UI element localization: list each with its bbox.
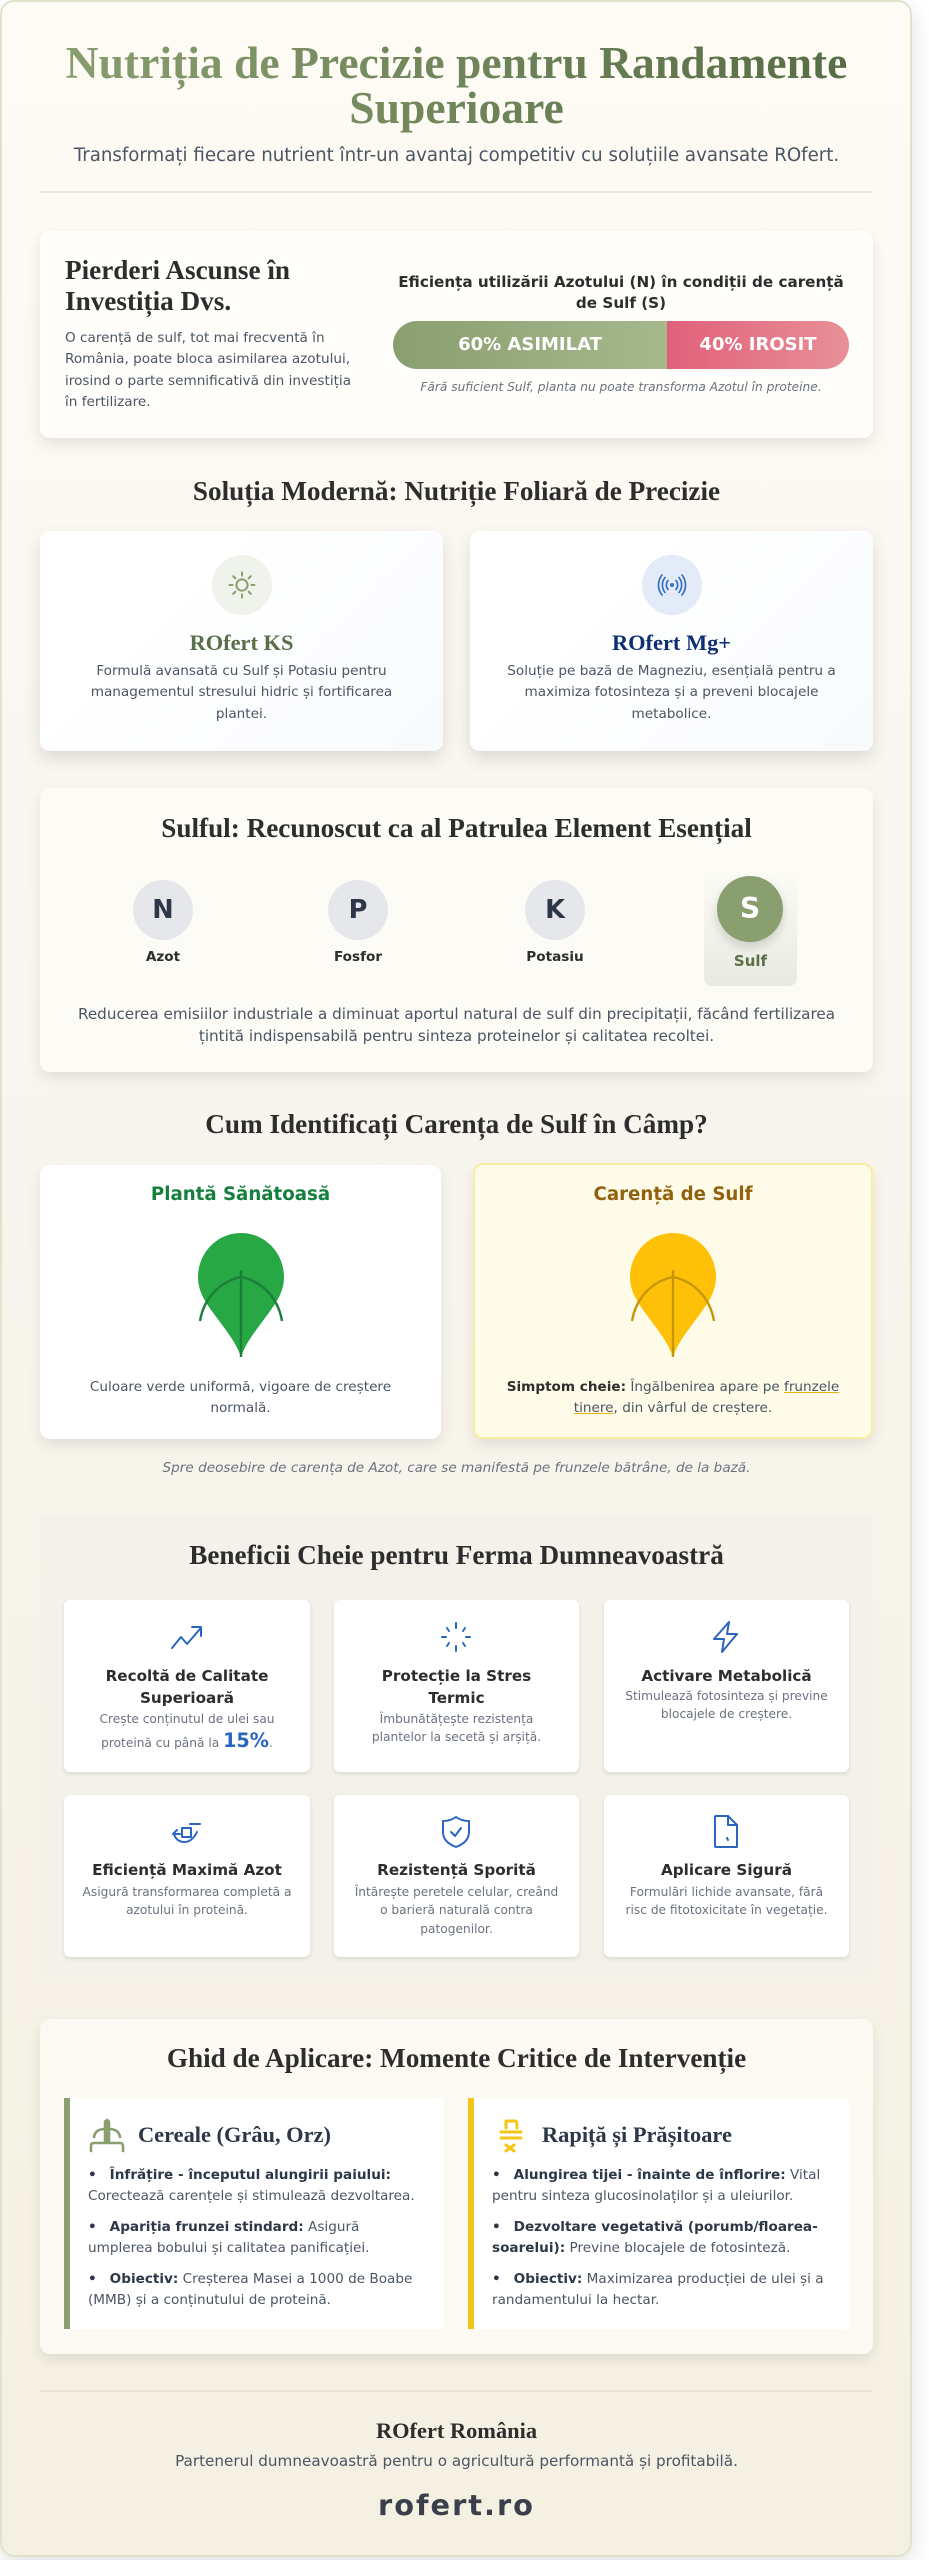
footer text: Partenerul dumneavoastră pentru o agricultură performantă și profitabilă. <box>175 2452 738 2470</box>
text: deficiency <box>507 1378 840 1416</box>
benefit: nitrogen efficiency: Eficiență Maximă Azot <box>92 1861 282 1879</box>
bar chart: nitrogen use <box>393 321 849 369</box>
benefit: safe application <box>604 1795 849 1957</box>
text: deficiency: tinere, din vârful de creștere. <box>574 1400 772 1416</box>
benefit: quality: Superioară <box>140 1689 234 1707</box>
heading: guide: Ghid de Aplicare: Momente Critice de Intervenție <box>167 2043 746 2073</box>
benefit: nitrogen efficiency <box>64 1795 310 1957</box>
benefit: heat stress: plantelor la secetă și arșiță. <box>372 1730 541 1744</box>
benefit: safe application: risc de fitotoxicitate în vegetație. <box>626 1903 828 1917</box>
element: N <box>133 880 193 965</box>
product text: managementul stresului hidric și fortificarea <box>91 684 392 700</box>
text: sulfur: Reducerea emisiilor industriale a diminuat aportul natural de sulf din precipitații, făcând fertilizarea <box>78 1005 835 1023</box>
heading: hidden losses: Investiția Dvs. <box>65 286 231 316</box>
chart heading <box>398 273 844 312</box>
benefit: nitrogen efficiency: azotului în proteină. <box>126 1903 248 1917</box>
icon: cereal plant <box>90 2118 124 2152</box>
title: Nutriția de Precizie pentru Randamente <box>66 37 847 88</box>
benefit: quality: proteină cu până la 15%. <box>101 1729 273 1752</box>
panel: cereals: • Apariția frunzei stindard: Asigură <box>88 2219 359 2235</box>
subtitle: Transformați fiecare nutrient într-un avantaj competitiv cu soluțiile avansate ROfert. <box>74 145 839 166</box>
text: deficiency: Simptom cheie: Îngălbenirea apare pe frunzele <box>507 1379 839 1395</box>
heading: hidden losses <box>65 255 290 318</box>
crop list: pentru sinteza glucosinolaților și a uleiurilor. <box>492 2188 793 2204</box>
benefit: resistance: Rezistență Sporită <box>377 1861 536 1879</box>
benefit: nitrogen efficiency: Asigură transformarea completă a <box>83 1885 291 1899</box>
benefit: safe application: Formulări lichide avansate, fără <box>630 1885 823 1899</box>
icon: sun <box>212 555 272 615</box>
benefit: metabolic: blocajele de creștere. <box>661 1707 792 1721</box>
chart heading: Eficiența utilizării Azotului (N) în condiții de carență <box>398 273 844 291</box>
benefit: heat stress: Termic <box>428 1689 485 1707</box>
bar segment: wasted <box>667 321 849 369</box>
product text: Formulă avansată cu Sulf și Potasiu pentru <box>96 663 387 679</box>
crop list: Corectează carențele și stimulează dezvoltarea. <box>88 2188 415 2204</box>
text: hidden losses <box>64 330 351 410</box>
benefit: metabolic: Stimulează fotosinteza și previne <box>625 1689 828 1703</box>
crop title: Rapiță și Prășitoare <box>542 2122 732 2147</box>
panel: cereals <box>64 2098 444 2329</box>
icon: rapeseed <box>500 2120 522 2153</box>
benefit: quality: Recoltă de Calitate <box>106 1667 268 1685</box>
product text: maximiza fotosinteza și a preveni blocajele <box>525 684 818 700</box>
panel: rapeseed: • Dezvoltare vegetativă (porumb/floarea- <box>492 2219 818 2235</box>
panel: rapeseed <box>468 2098 849 2329</box>
text: sulfur <box>78 1005 835 1045</box>
crop title: Cereale (Grâu, Orz) <box>138 2122 331 2147</box>
panel: cereals: • Obiectiv: Creșterea Masei a 1000 de Boabe <box>88 2271 412 2287</box>
element: P: P <box>349 895 367 925</box>
heading: hidden losses: Pierderi Ascunse în <box>65 255 290 285</box>
panel: cereals: umplerea bobului și calitatea panificației. <box>88 2240 369 2256</box>
heading: identify deficiency: Cum Identificați Carența de Sulf în Câmp? <box>205 1109 708 1139</box>
benefit: resistance <box>334 1795 579 1957</box>
bar segment: assimilated <box>393 321 667 369</box>
heading: modern solution: Soluția Modernă: Nutriție Foliară de Precizie <box>193 476 720 506</box>
product name: ROfert KS <box>190 630 293 655</box>
text: hidden losses: irosind o parte semnificativă din investiția <box>65 373 351 389</box>
element: K <box>525 880 585 965</box>
footer link: rofert.ro <box>378 2488 535 2522</box>
element: K: K <box>545 895 565 925</box>
element: S highlighted: Sulf <box>734 952 767 970</box>
benefit: resistance: Întărește peretele celular, creând <box>355 1885 558 1899</box>
label: healthy: Plantă Sănătoasă <box>151 1184 330 1205</box>
benefit: resistance: o barieră naturală contra <box>380 1903 533 1917</box>
crop list <box>88 2166 415 2204</box>
product text: plantei. <box>216 706 267 722</box>
panel: ROfert Mg+ <box>470 531 873 751</box>
product name: ROfert Mg+ <box>612 630 731 655</box>
label: deficiency: Carență de Sulf <box>593 1184 753 1205</box>
chart heading: de Sulf (S) <box>576 294 666 312</box>
icon: yellow leaf <box>630 1233 716 1357</box>
footer title: ROfert România <box>376 2418 537 2443</box>
heading: benefits: Beneficii Cheie pentru Ferma Dumneavoastră <box>189 1540 724 1570</box>
element: N: Azot <box>146 949 180 965</box>
text: hidden losses: România, poate bloca asimilarea azotului, <box>65 351 350 367</box>
note: Spre deosebire de carența de Azot, care se manifestă pe frunzele bătrâne, de la bază. <box>163 1460 750 1476</box>
panel: sulfur deficiency <box>473 1163 873 1439</box>
panel: rapeseed: randamentului la hectar. <box>492 2292 659 2308</box>
benefit: heat stress: Protecție la Stres <box>382 1667 531 1685</box>
panel: cereals: (MMB) și a conținutului de proteină. <box>88 2292 331 2308</box>
panel: benefits <box>40 1515 873 1980</box>
product text: metabolice. <box>632 706 711 722</box>
benefit: heat stress <box>334 1600 579 1772</box>
benefit: metabolic <box>604 1600 849 1772</box>
panel: rapeseed: • Obiectiv: Maximizarea producției de ulei și a <box>492 2271 824 2287</box>
text: hidden losses: în fertilizare. <box>65 394 151 410</box>
element: K: Potasiu <box>526 949 584 965</box>
panel: ROfert KS <box>40 531 443 751</box>
element: N: N <box>152 895 174 925</box>
text: healthy: normală. <box>210 1400 271 1416</box>
benefit: resistance: patogenilor. <box>420 1922 493 1936</box>
element: S highlighted: S <box>740 892 760 925</box>
panel: rapeseed: soarelui): Previne blocajele de fotosinteză. <box>492 2240 790 2256</box>
product text <box>91 663 392 722</box>
footer <box>175 2418 738 2522</box>
benefit: quality: Crește conținutul de ulei sau <box>99 1712 275 1726</box>
benefit: heat stress: Îmbunătățește rezistența <box>380 1712 533 1726</box>
icon: signal <box>642 555 702 615</box>
heading: sulfur: Sulful: Recunoscut ca al Patrulea Element Esențial <box>161 813 752 843</box>
text: sulfur: țintită indispensabilă pentru sinteza proteinelor și calitatea recoltei. <box>199 1027 714 1045</box>
product text <box>507 663 836 722</box>
benefit: safe application: Aplicare Sigură <box>661 1861 792 1879</box>
panel: healthy plant <box>40 1165 441 1439</box>
title <box>40 40 873 138</box>
element: S highlighted <box>704 872 797 986</box>
benefit: quality <box>64 1600 310 1772</box>
chart caption: Fără suficient Sulf, planta nu poate transforma Azotul în proteine. <box>420 380 822 394</box>
panel: application guide <box>40 2019 873 2354</box>
text: hidden losses: O carență de sulf, tot mai frecventă în <box>65 330 325 346</box>
text: healthy <box>90 1379 391 1416</box>
panel: hidden losses <box>40 231 873 438</box>
bar segment: assimilated: 60% ASIMILAT <box>458 334 602 355</box>
element: P <box>328 880 388 965</box>
panel: sulfur fourth element <box>40 788 873 1072</box>
product text: Soluție pe bază de Magneziu, esențială pentru a <box>507 663 836 679</box>
crop list: • Alungirea tijei - înainte de înflorire: Vital <box>492 2167 820 2183</box>
crop list: • Înfrățire - începutul alungirii paiului: <box>88 2167 391 2183</box>
text: healthy: Culoare verde uniformă, vigoare de creștere <box>90 1379 391 1395</box>
crop list <box>492 2167 820 2204</box>
bar segment: wasted: 40% IROSIT <box>699 334 817 355</box>
element: P: Fosfor <box>334 949 382 965</box>
benefit: metabolic: Activare Metabolică <box>641 1667 812 1685</box>
title: Superioare <box>349 82 564 133</box>
icon: green leaf <box>198 1233 284 1357</box>
